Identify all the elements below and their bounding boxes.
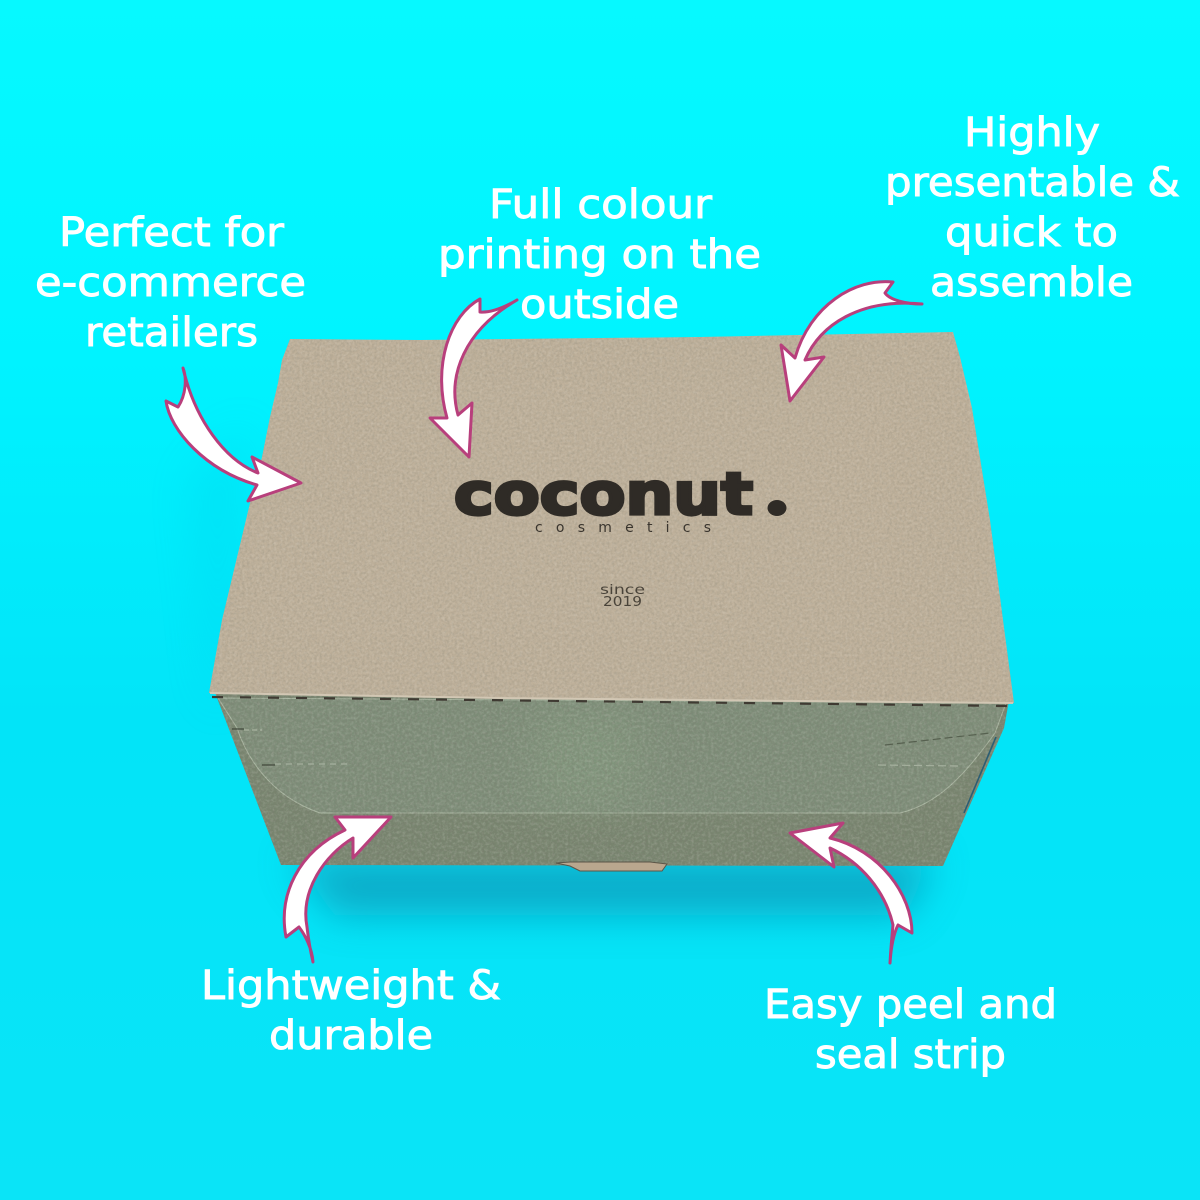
callout text: e-commerce retailers	[35, 210, 306, 356]
cardboard box	[205, 328, 1017, 871]
callout text: easy peel and seal strip: Easy peel and	[764, 982, 1057, 1028]
box front panel	[214, 690, 1010, 866]
callout text: full colour printing: Full colour	[489, 182, 713, 228]
top texture	[205, 328, 1017, 708]
callout text: lightweight and durable: Lightweight &	[201, 963, 501, 1009]
lighter tape band	[535, 712, 640, 808]
callout text: e-commerce retailers: e-commerce	[35, 260, 306, 306]
callout text: full colour printing	[438, 182, 761, 328]
box top panel	[209, 332, 1014, 703]
logo subtitle: cosmetics	[535, 520, 711, 536]
crimped edge shadow	[212, 697, 1010, 706]
arrow: to printed top	[430, 299, 517, 457]
callout text: easy peel and seal strip	[764, 982, 1057, 1078]
dark right edge	[964, 737, 996, 813]
logo dot	[768, 500, 786, 516]
since 2019 stamp	[600, 582, 645, 610]
arrow: to front flap	[284, 817, 391, 962]
pale crimped lip	[210, 693, 1013, 703]
callout text: full colour printing: printing on the	[438, 232, 761, 278]
logo wordmark: coconut	[454, 460, 753, 528]
callout text: full colour printing: outside	[520, 282, 679, 328]
arrow: to top right of box	[781, 282, 922, 401]
callout text: presentable and quick: quick to	[945, 210, 1118, 256]
arrow: to top left of box	[166, 368, 301, 501]
callout text: easy peel and seal strip: seal strip	[815, 1032, 1006, 1078]
callout text: e-commerce retailers: retailers	[85, 310, 258, 356]
closing flap	[218, 698, 1006, 813]
perforated peel strip	[232, 729, 990, 766]
box shadow	[190, 420, 935, 915]
callout text: presentable and quick: Highly	[964, 110, 1100, 156]
callout text: presentable and quick: assemble	[930, 260, 1133, 306]
coconut cosmetics logo	[454, 460, 786, 610]
callout text: presentable and quick: presentable &	[885, 160, 1180, 206]
callout text: lightweight and durable: durable	[269, 1013, 433, 1059]
callout text: presentable and quick	[885, 110, 1180, 306]
arrow: to peel and seal strip	[790, 823, 912, 963]
since 2019 stamp: 2019	[603, 594, 642, 610]
front texture	[210, 690, 1010, 870]
since 2019 stamp: since	[600, 582, 645, 598]
callout text: e-commerce retailers: Perfect for	[59, 210, 285, 256]
bottom tab	[556, 862, 667, 871]
callout text: lightweight and durable	[201, 963, 501, 1059]
